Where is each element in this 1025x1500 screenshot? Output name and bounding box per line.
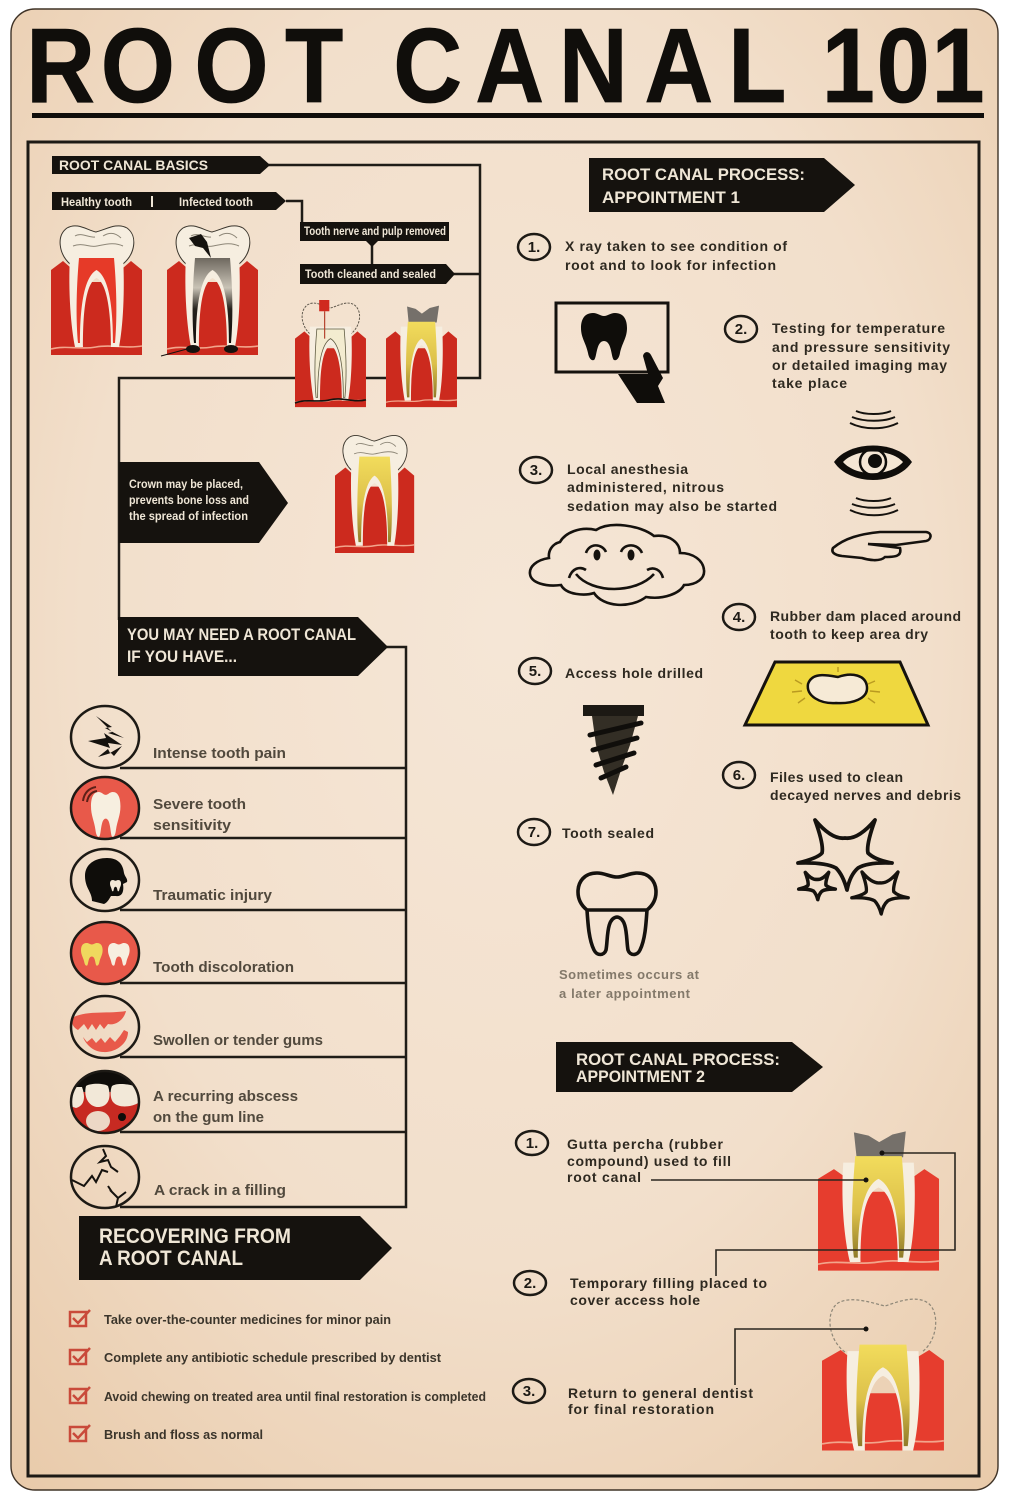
step 3: sedation may also be started xyxy=(567,498,777,514)
heading: appointment 1: ROOT CANAL PROCESS: xyxy=(602,165,805,184)
icon: waves, eye, waves and hand xyxy=(832,411,931,560)
step 6: 6. xyxy=(733,767,745,784)
heading: appointment 2 xyxy=(556,1042,823,1092)
icon: drill xyxy=(583,705,644,795)
step 3: 3. xyxy=(523,1383,535,1400)
icon: sealed tooth outline xyxy=(578,873,656,954)
icon: smiling cloud xyxy=(530,525,704,605)
step 3: Local anesthesia xyxy=(567,461,688,477)
illustration: nerve and pulp removed xyxy=(295,300,366,407)
step 2 xyxy=(725,316,950,391)
heading: you may need a root canal: IF YOU HAVE... xyxy=(127,647,237,666)
checklist item 3: Avoid chewing on treated area until final restoration is completed xyxy=(104,1389,486,1404)
heading: recovering: A ROOT CANAL xyxy=(99,1247,243,1270)
illustration: sealed tooth xyxy=(818,1131,939,1271)
illustration: cleaned and sealed tooth xyxy=(386,306,457,407)
step 5: Access hole drilled xyxy=(565,665,703,681)
heading: appointment 1: APPOINTMENT 1 xyxy=(602,188,740,207)
checklist item 2: Complete any antibiotic schedule prescribed by dentist xyxy=(104,1350,442,1365)
callout: crown may be placed: the spread of infection xyxy=(129,509,248,523)
step 7: Tooth sealed xyxy=(562,825,654,841)
item: tooth discoloration xyxy=(71,922,294,984)
item: traumatic injury xyxy=(71,849,273,911)
step 7: 7. xyxy=(528,824,540,841)
checklist item 4: Brush and floss as normal xyxy=(104,1427,263,1442)
item: intense tooth pain xyxy=(71,706,286,768)
step 5 xyxy=(519,658,703,684)
note: later appointment xyxy=(559,967,700,1001)
step 2: cover access hole xyxy=(570,1292,700,1308)
illustration: tooth with crown xyxy=(335,435,414,553)
step 1 xyxy=(518,234,787,273)
step 3 xyxy=(520,457,777,514)
step 6: decayed nerves and debris xyxy=(770,787,961,803)
item: tooth discoloration: Tooth discoloration xyxy=(153,959,294,976)
heading: root canal basics: ROOT CANAL BASICS xyxy=(59,157,208,173)
panel: appointment 2 xyxy=(513,1042,955,1450)
title: ROOT CANAL 101 xyxy=(26,7,985,125)
item: traumatic injury: Traumatic injury xyxy=(153,887,273,904)
step 1 xyxy=(516,1131,731,1185)
callout: crown may be placed: prevents bone loss and xyxy=(129,493,249,507)
item: recurring abscess xyxy=(70,1070,298,1136)
heading: appointment 1 xyxy=(589,158,855,212)
label: tooth cleaned and sealed: Tooth cleaned and sealed xyxy=(305,267,436,281)
heading: appointment 2: ROOT CANAL PROCESS: xyxy=(576,1050,780,1069)
step 2: Temporary filling placed to xyxy=(570,1275,767,1291)
label bar: healthy and infected tooth xyxy=(52,192,286,210)
step 1: root canal xyxy=(567,1169,641,1185)
heading: recovering xyxy=(79,1216,392,1280)
step 2: Testing for temperature xyxy=(772,320,945,336)
step 2 xyxy=(514,1271,767,1308)
step 1: 1. xyxy=(526,1135,538,1152)
step 7 xyxy=(518,819,654,845)
note: later appointment: a later appointment xyxy=(559,986,691,1001)
step 3: 3. xyxy=(530,462,542,479)
icon: file stars xyxy=(798,820,908,914)
step 2: 2. xyxy=(735,321,747,338)
label bar: healthy and infected tooth: Healthy tooth xyxy=(61,195,132,209)
panel: root canal basics xyxy=(51,156,480,620)
label: tooth cleaned and sealed xyxy=(300,264,455,284)
icon: x-ray with hand xyxy=(556,303,668,403)
step 3: Return to general dentist xyxy=(568,1385,753,1401)
step 3: administered, nitrous xyxy=(567,479,724,495)
step 5: 5. xyxy=(529,663,541,680)
checklist item 1: Take over-the-counter medicines for minor pain xyxy=(104,1312,391,1327)
step 2: or detailed imaging may xyxy=(772,357,947,373)
illustration: restored tooth xyxy=(822,1299,944,1450)
step 1: root and to look for infection xyxy=(565,257,776,273)
item: severe tooth sensitivity: sensitivity xyxy=(153,817,232,834)
item: severe tooth sensitivity xyxy=(71,777,246,839)
item: crack in a filling xyxy=(71,1146,286,1208)
item: swollen or tender gums: Swollen or tender gums xyxy=(153,1032,323,1049)
step 3 xyxy=(513,1379,753,1417)
step 4: 4. xyxy=(733,609,745,626)
heading: you may need a root canal: YOU MAY NEED A ROOT CANAL xyxy=(127,625,356,644)
step 4: tooth to keep area dry xyxy=(770,626,928,642)
item: crack in a filling: A crack in a filling xyxy=(154,1182,286,1199)
note: later appointment: Sometimes occurs at xyxy=(559,967,700,982)
step 2: take place xyxy=(772,375,847,391)
heading: recovering: RECOVERING FROM xyxy=(99,1225,291,1248)
item: intense tooth pain: Intense tooth pain xyxy=(153,745,286,762)
step 1: X ray taken to see condition of xyxy=(565,238,787,254)
step 2: and pressure sensitivity xyxy=(772,339,950,355)
panel: recovering from a root canal xyxy=(70,1216,486,1442)
item: recurring abscess: A recurring abscess xyxy=(153,1088,298,1105)
step 4 xyxy=(723,604,961,642)
callout: crown may be placed xyxy=(119,462,288,543)
label: tooth nerve and pulp removed: Tooth nerve and pulp removed xyxy=(304,224,446,238)
item: swollen or tender gums xyxy=(71,996,323,1058)
step 6: Files used to clean xyxy=(770,769,903,785)
heading: appointment 2: APPOINTMENT 2 xyxy=(576,1067,705,1086)
heading: you may need a root canal xyxy=(118,617,388,676)
item: recurring abscess: on the gum line xyxy=(153,1109,264,1126)
panel: appointment 1 xyxy=(518,158,961,1001)
heading: root canal basics xyxy=(52,156,270,174)
step 6 xyxy=(723,762,961,803)
step 3: for final restoration xyxy=(568,1401,714,1417)
label: tooth nerve and pulp removed xyxy=(300,222,449,247)
panel: you may need a root canal xyxy=(70,617,406,1208)
step 2: 2. xyxy=(524,1275,536,1292)
illustration: infected tooth xyxy=(161,226,258,356)
label bar: healthy and infected tooth: Infected tooth xyxy=(179,195,253,209)
item: severe tooth sensitivity: Severe tooth xyxy=(153,796,246,813)
step 4: Rubber dam placed around xyxy=(770,608,961,624)
step 1: 1. xyxy=(528,239,540,256)
step 1: compound) used to fill xyxy=(567,1153,731,1169)
step 1: Gutta percha (rubber xyxy=(567,1136,724,1152)
leader lines xyxy=(651,1150,955,1385)
icon: rubber dam xyxy=(745,662,928,725)
callout: crown may be placed: Crown may be placed, xyxy=(129,477,243,491)
illustration: healthy tooth xyxy=(51,226,142,355)
